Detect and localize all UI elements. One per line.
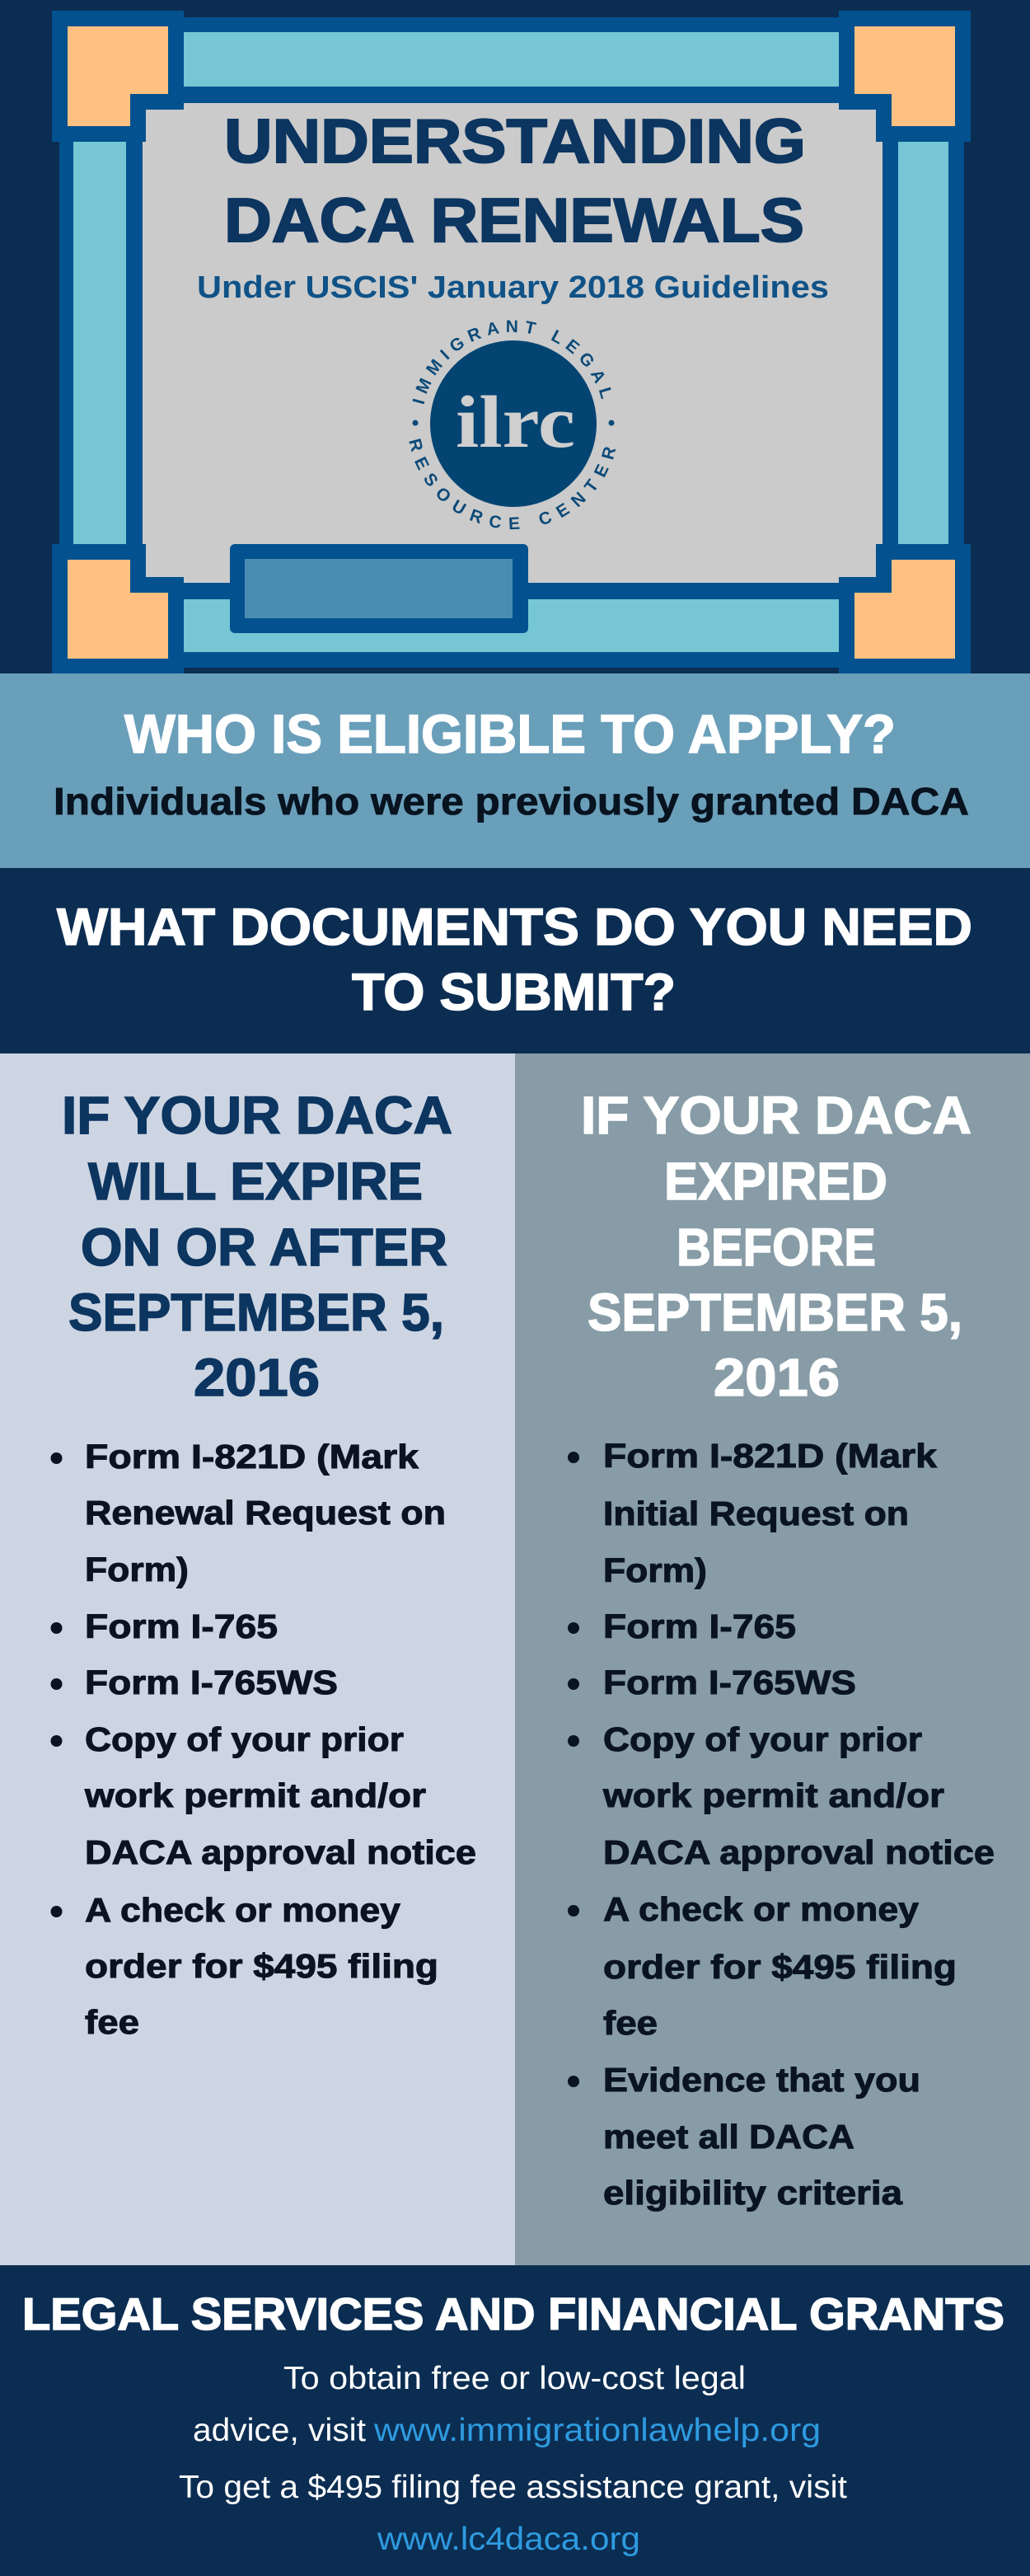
right column document list: Form I-821D (Mark xyxy=(603,1437,937,1475)
fee grant text: www.lc4daca.org xyxy=(377,2522,640,2557)
title: UNDERSTANDING xyxy=(224,106,806,176)
left column document list: work permit and/or xyxy=(84,1776,426,1814)
frame bar: bottom xyxy=(184,583,840,668)
left column document list: A check or money xyxy=(85,1891,400,1929)
left column heading: SEPTEMBER 5, xyxy=(68,1283,444,1342)
right column document list: order for $495 filing xyxy=(603,1948,957,1986)
legal advice text: www.immigrationlawhelp.org xyxy=(373,2413,821,2448)
legal advice text: To obtain free or low-cost legal xyxy=(283,2361,746,2396)
corner: bottom right xyxy=(854,560,955,659)
right column heading: IF YOUR DACA xyxy=(581,1086,971,1145)
panel: what documents xyxy=(0,868,1030,1053)
left column document list: order for $495 filing xyxy=(85,1947,438,1985)
left column document list: Form I-821D (Mark xyxy=(85,1438,419,1476)
right column heading: 2016 xyxy=(714,1348,840,1407)
left column document list: DACA approval notice xyxy=(85,1833,476,1871)
panel: grey title card xyxy=(143,103,883,583)
logo: ILRC xyxy=(409,320,616,529)
right column document list: Form) xyxy=(603,1551,707,1589)
legal advice text xyxy=(193,2361,821,2448)
right column document list: Evidence that you xyxy=(603,2061,920,2099)
frame bar: top xyxy=(184,17,840,103)
left column heading: WILL EXPIRE xyxy=(88,1152,423,1211)
right column heading xyxy=(581,1086,971,1407)
title: DACA RENEWALS xyxy=(224,185,804,255)
panel: legal services footer xyxy=(0,2265,1030,2576)
fee grant text: To get a $495 filing fee assistance grant, visit xyxy=(179,2470,847,2505)
heading: what documents: TO SUBMIT? xyxy=(352,964,676,1021)
legal advice text: advice, visit xyxy=(193,2413,366,2448)
heading: who is eligible: WHO IS ELIGIBLE TO APPLY? xyxy=(124,703,896,764)
right column document list: Form I-765WS xyxy=(603,1663,856,1701)
panel: right column, expired before xyxy=(515,1053,1030,2265)
eligibility text: Individuals who were previously granted DACA xyxy=(54,780,969,823)
left column document list: Form I-765WS xyxy=(85,1663,338,1701)
right column document list: meet all DACA xyxy=(603,2118,854,2156)
left column document list: fee xyxy=(85,2003,139,2041)
fee grant text xyxy=(179,2470,847,2557)
right column document list: fee xyxy=(603,2004,658,2042)
left column document list: Copy of your prior xyxy=(85,1720,404,1758)
left column heading: ON OR AFTER xyxy=(81,1218,447,1277)
right column document list: DACA approval notice xyxy=(603,1833,995,1871)
frame bar: right xyxy=(883,142,964,547)
small blue plaque xyxy=(230,544,528,633)
right column heading: EXPIRED xyxy=(664,1152,887,1211)
heading: what documents xyxy=(57,899,972,1021)
header frame xyxy=(59,17,964,668)
left column document list xyxy=(51,1438,476,2041)
corner: top left xyxy=(68,26,168,126)
heading: what documents: WHAT DOCUMENTS DO YOU NEED xyxy=(57,899,972,956)
logo: ILRC: ilrc xyxy=(456,382,575,463)
logo: ILRC: RESOURCE CENTER xyxy=(409,439,616,529)
footer heading: LEGAL SERVICES AND FINANCIAL GRANTS xyxy=(22,2288,1004,2339)
right column heading: BEFORE xyxy=(677,1218,876,1277)
left column document list: Form I-765 xyxy=(85,1607,278,1645)
right column document list: Initial Request on xyxy=(603,1494,909,1532)
logo: ILRC: IMMIGRANT LEGAL xyxy=(412,320,611,404)
subtitle: Under USCIS' January 2018 Guidelines xyxy=(197,270,829,305)
left column document list: Renewal Request on xyxy=(85,1494,446,1532)
corner: top right xyxy=(854,26,955,126)
left column heading xyxy=(62,1086,452,1407)
left column document list: Form) xyxy=(85,1551,189,1588)
right column document list: Form I-765 xyxy=(603,1607,796,1645)
panel: who is eligible xyxy=(0,673,1030,868)
right column document list xyxy=(568,1437,995,2212)
left column heading: 2016 xyxy=(194,1348,320,1407)
frame bar: left xyxy=(59,142,143,547)
title xyxy=(224,106,806,255)
right column document list: A check or money xyxy=(603,1890,919,1928)
left column heading: IF YOUR DACA xyxy=(62,1086,452,1145)
panel: left column, expires on or after xyxy=(0,1053,515,2265)
right column document list: Copy of your prior xyxy=(603,1720,922,1758)
right column document list: eligibility criteria xyxy=(603,2174,903,2212)
right column document list: work permit and/or xyxy=(602,1776,944,1814)
right column heading: SEPTEMBER 5, xyxy=(588,1283,962,1342)
corner: bottom left xyxy=(68,560,168,659)
